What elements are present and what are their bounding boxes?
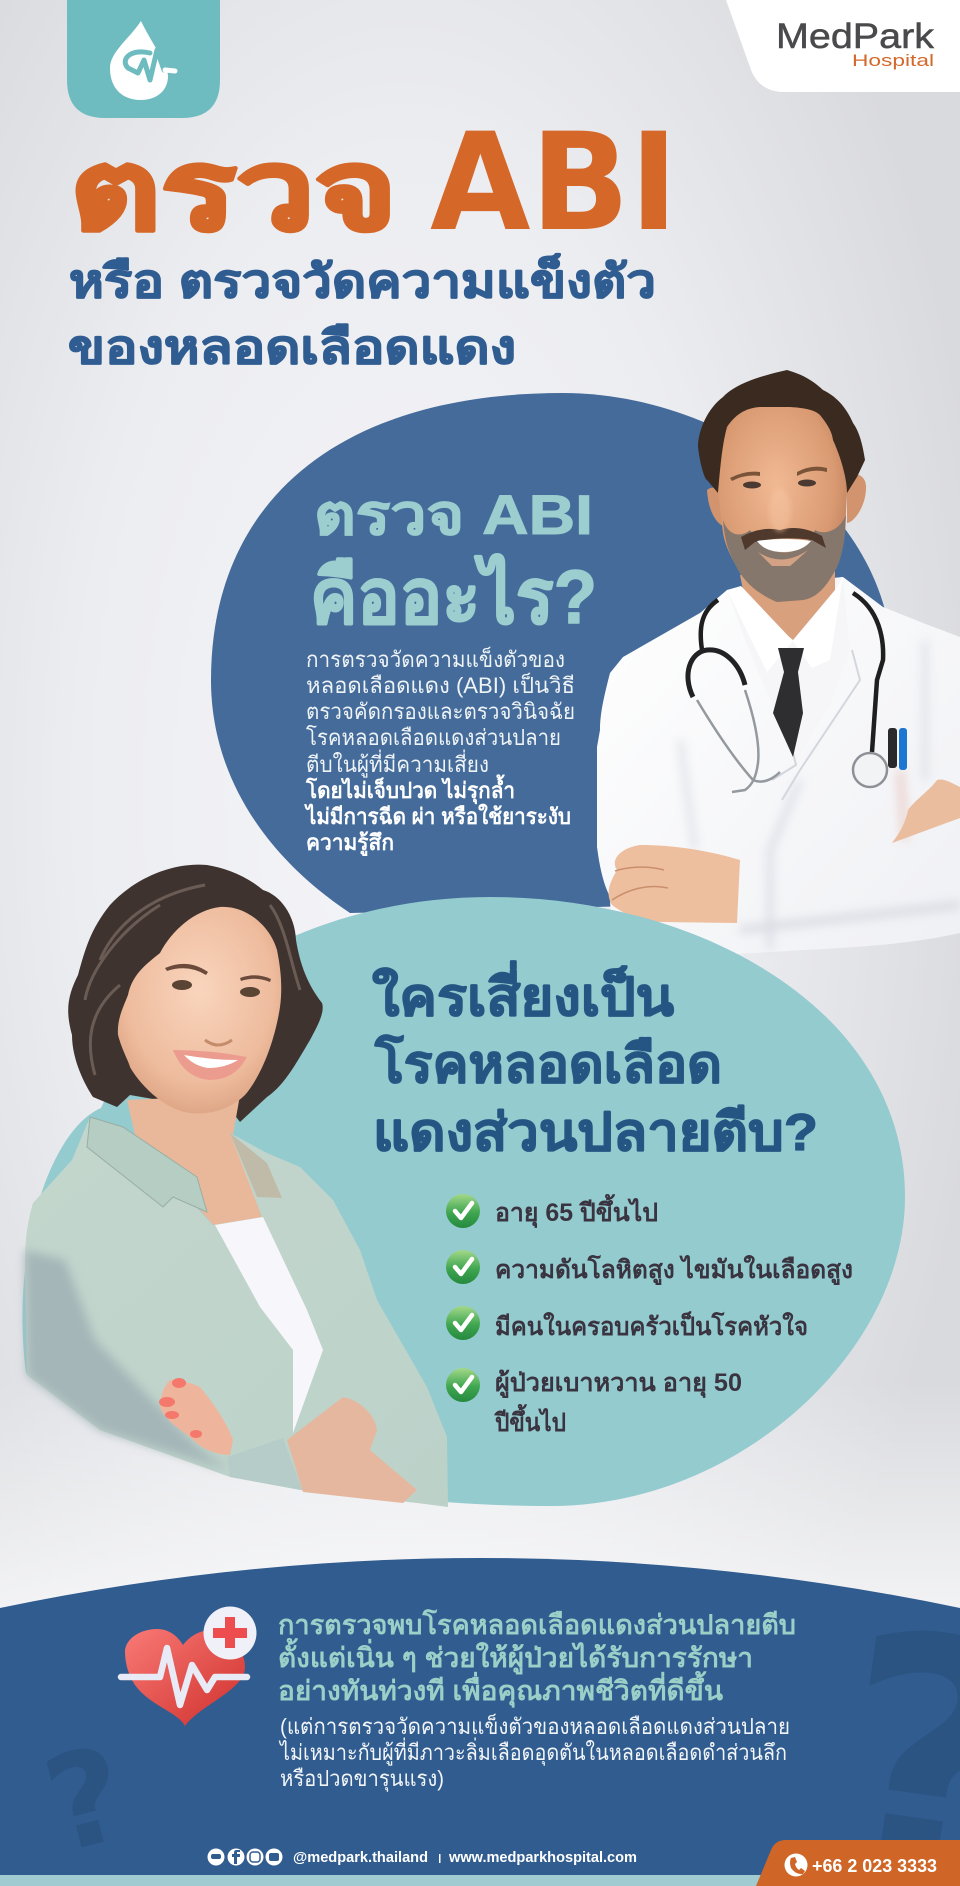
pens in pocket (888, 728, 907, 770)
body text: โรคหลอดเลือดแดงส่วนปลาย (306, 725, 561, 750)
banner note (278, 1712, 790, 1792)
body text: การตรวจวัดความแข็งตัวของ (306, 645, 565, 672)
heading: who is at risk: ใครเสี่ยงเป็น (372, 961, 674, 1027)
body text: โดยไม่เจ็บปวด ไม่รุกล้ำ (305, 774, 515, 805)
doctor coat (597, 577, 960, 960)
title: ตรวจ ABI: ตรวจ (70, 128, 397, 253)
item: diabetes: ผู้ป่วยเบาหวาน อายุ 50 (495, 1369, 742, 1399)
icon tile: blood drop with pulse (67, 0, 220, 118)
item: diabetes (446, 1368, 742, 1437)
footer links: www.medparkhospital.com (448, 1849, 637, 1866)
social icons (208, 1848, 282, 1866)
body text: ความรู้สึก (306, 830, 394, 857)
heading: คืออะไร?: คืออะไร? (310, 553, 597, 640)
banner message: การตรวจพบโรคหลอดเลือดแดงส่วนปลายตีบ (278, 1608, 796, 1640)
woman neck and chest (127, 1095, 262, 1226)
item: age 65 (446, 1193, 658, 1229)
item: high blood pressure (446, 1250, 853, 1286)
checklist (446, 1193, 853, 1437)
doctor smile (757, 539, 811, 552)
doctor hair (698, 370, 865, 493)
doctor left hand (609, 845, 740, 923)
icon: phone (784, 1854, 808, 1876)
doctor right hand (892, 779, 960, 843)
woman right collar (230, 1133, 282, 1198)
woman forearm (287, 1397, 417, 1503)
doctor ears (707, 474, 866, 527)
doctor neck (740, 560, 835, 640)
illustration: doctor (597, 370, 960, 960)
body text: ตรวจคัดกรองและตรวจวินิจฉัย (306, 699, 575, 724)
doctor collar (727, 577, 843, 672)
stethoscope (688, 593, 887, 792)
woman shirt (25, 1117, 448, 1507)
doctor eyes (730, 467, 827, 488)
heading: ตรวจ ABI: ตรวจ ABI (314, 483, 593, 546)
panel: bottom banner (0, 1558, 960, 1886)
woman eyes (165, 964, 271, 997)
doctor moustache (741, 528, 826, 550)
doctor coat shading (680, 640, 960, 950)
banner note: หรือปวดขารุนแรง) (280, 1766, 444, 1792)
subtitle: ของหลอดเลือดแดง (68, 321, 516, 373)
woman shirt shading (25, 1250, 228, 1470)
logo text: MedPark: MedPark (776, 17, 935, 56)
doctor nose (769, 488, 791, 532)
phone tag (756, 1840, 960, 1886)
woman left collar (87, 1117, 207, 1212)
footer links: @medpark.thailand (293, 1849, 428, 1866)
woman sleeve cuff (227, 1438, 302, 1490)
panel: teal blob (22, 897, 905, 1506)
title: ตรวจ ABI (70, 104, 678, 261)
doctor lapels (772, 650, 860, 800)
body text (304, 645, 575, 857)
doctor shirt (727, 577, 850, 760)
panel text: what is ABI (304, 483, 597, 857)
banner note: (แต่การตรวจวัดความแข็งตัวของหลอดเลือดแดงส่วนปลาย (280, 1712, 790, 1739)
body text: หลอดเลือดแดง (ABI) เป็นวิธี (306, 671, 575, 698)
doctor face (718, 407, 847, 602)
banner message (278, 1608, 796, 1708)
item: family history (446, 1306, 808, 1341)
illustration: woman (25, 865, 448, 1507)
woman nose (205, 1040, 232, 1045)
title: ตรวจ ABI: ABI (430, 104, 678, 261)
body text: ตีบในผู้ที่มีความเสี่ยง (306, 749, 489, 778)
woman face (118, 907, 281, 1114)
item: diabetes: ปีขึ้นไป (494, 1403, 566, 1437)
item: family history: มีคนในครอบครัวเป็นโรคหัวใจ (495, 1311, 808, 1341)
item: age 65: อายุ 65 ปีขึ้นไป (495, 1193, 658, 1229)
doctor finger lines (612, 867, 668, 900)
woman hand (160, 1380, 233, 1455)
subtitle: หรือ ตรวจวัดความแข็งตัว (69, 253, 656, 307)
woman nails (159, 1378, 202, 1438)
banner message: อย่างทันท่วงที เพื่อคุณภาพชีวิตที่ดีขึ้น (278, 1670, 724, 1708)
icon: heart with pulse and cross (121, 1606, 256, 1726)
heading: who is at risk: โรคหลอดเลือด (374, 1033, 722, 1094)
doctor tie (773, 648, 804, 757)
woman hair (68, 865, 323, 1122)
footer links (293, 1849, 637, 1866)
woman smile (173, 1050, 247, 1080)
bottom strip (0, 1875, 960, 1886)
panel: blue blob (211, 393, 885, 913)
heading: who is at risk: แดงส่วนปลายตีบ? (373, 1104, 818, 1162)
heading: who is at risk (372, 961, 818, 1162)
woman hair highlights (85, 885, 300, 1075)
item: high blood pressure: ความดันโลหิตสูง ไขมันในเลือดสูง (495, 1254, 853, 1286)
logo card (726, 0, 960, 92)
decorative question mark: left: ? (31, 1717, 141, 1883)
phone tag: +66 2 023 3333 (812, 1856, 937, 1876)
subtitle (68, 253, 656, 373)
doctor beard (723, 515, 846, 602)
doctor skin under lip (758, 550, 808, 566)
banner message: ตั้งแต่เนิ่น ๆ ช่วยให้ผู้ป่วยได้รับการรักษา (278, 1637, 753, 1675)
woman white top (215, 1217, 323, 1433)
body text: ไม่มีการฉีด ผ่า หรือใช้ยาระงับ (304, 803, 571, 829)
logo text: Hospital: Hospital (852, 51, 934, 70)
banner note: ไม่เหมาะกับผู้ที่มีภาวะลิ่มเลือดอุดตันในหลอดเลือดดำส่วนลึก (278, 1737, 787, 1766)
